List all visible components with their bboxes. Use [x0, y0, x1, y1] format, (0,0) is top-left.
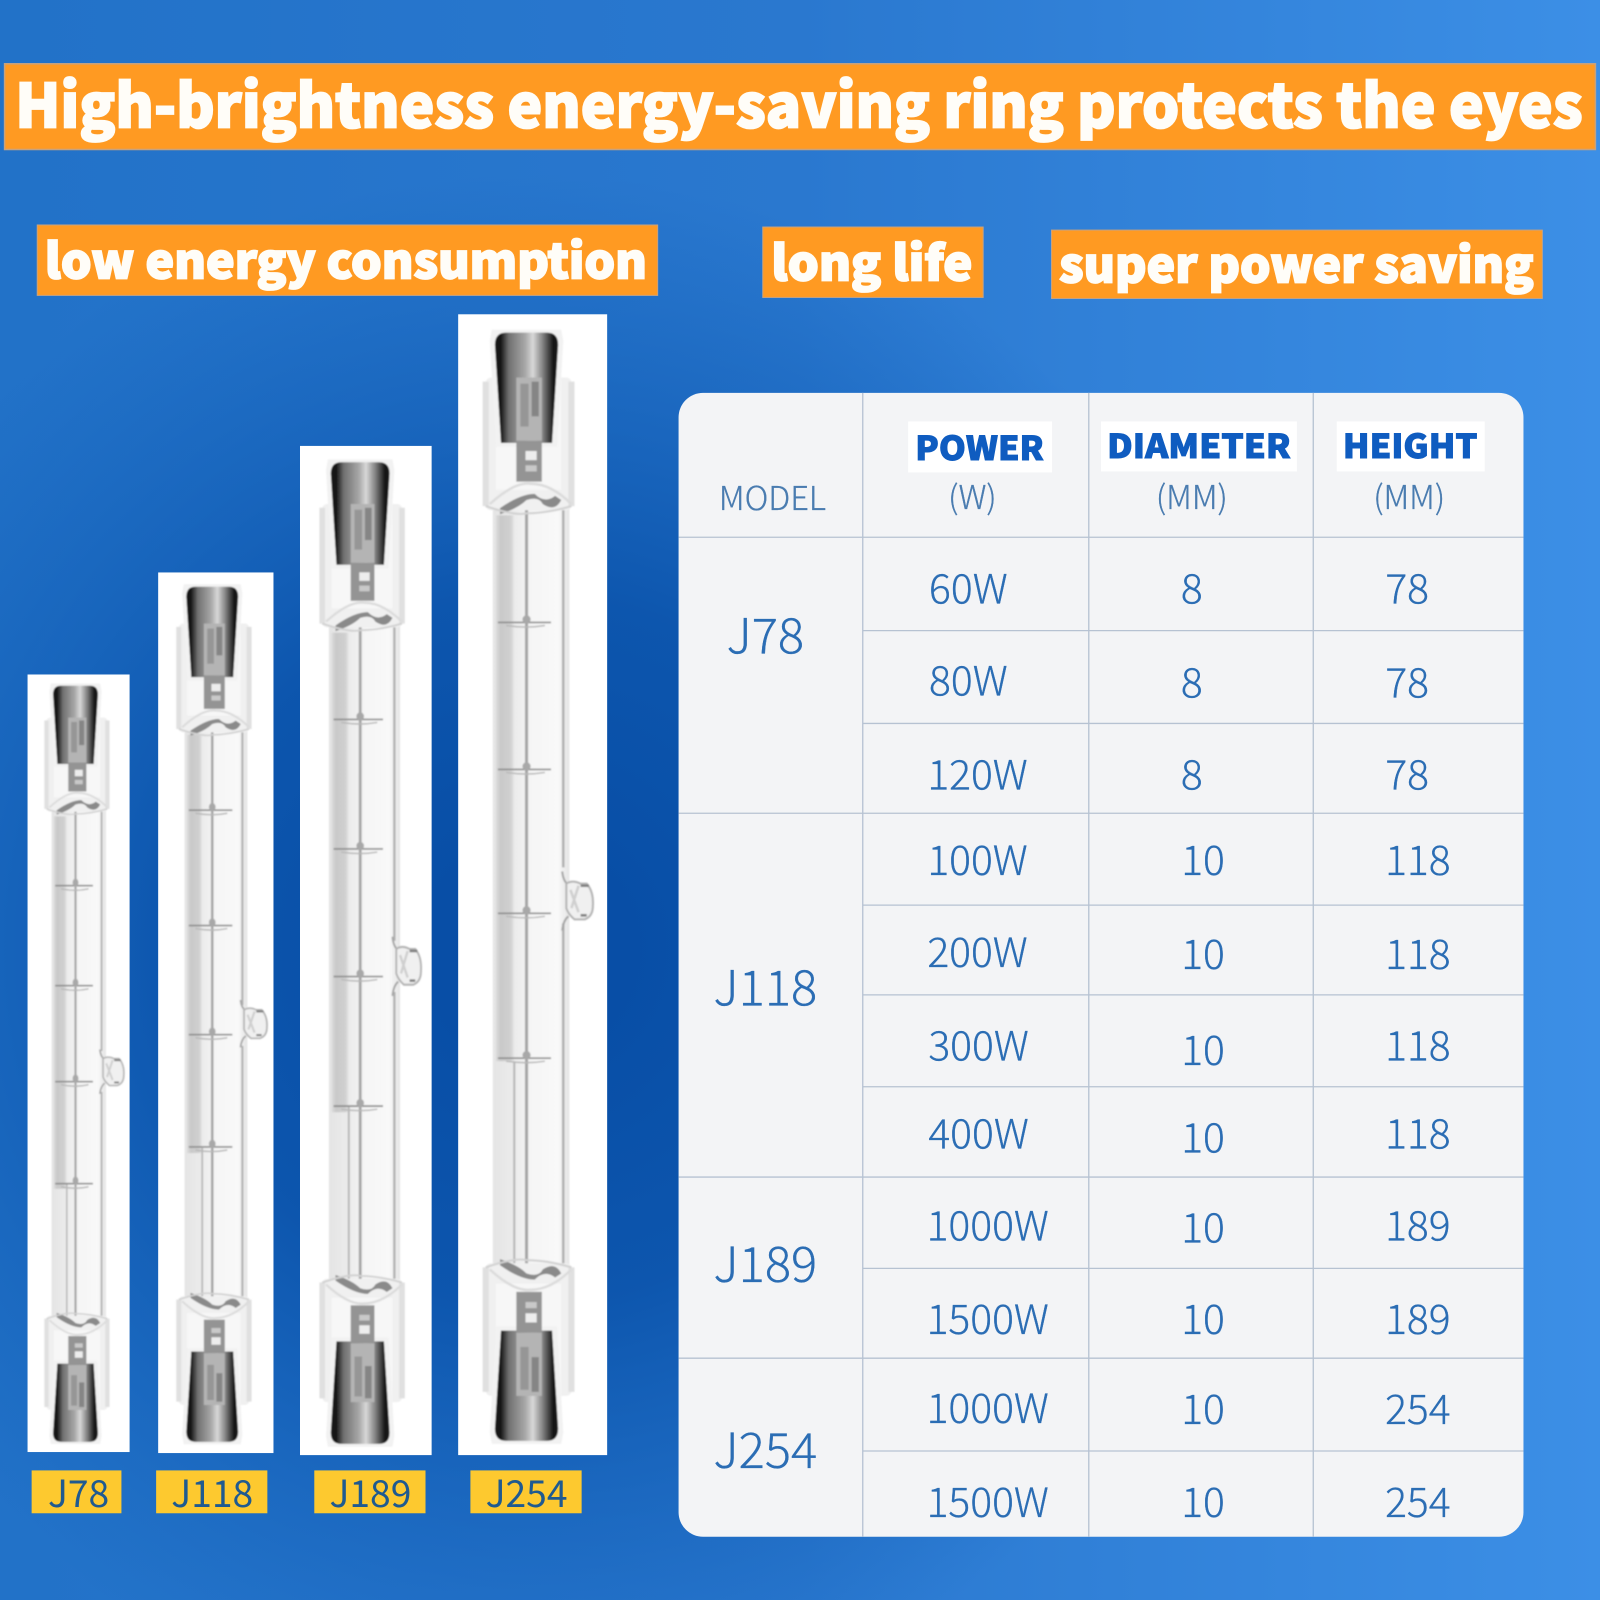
height column: 118 [1385, 922, 1451, 981]
power column: 100W [927, 828, 1028, 887]
table header: (MM) [1373, 472, 1445, 519]
power column: 1000W [927, 1193, 1049, 1252]
table header: DIAMETER [1107, 421, 1291, 468]
model names: J254 [713, 1412, 817, 1483]
badge: low energy consumption: low energy consumption [45, 223, 647, 293]
bulb J78 [28, 674, 130, 1452]
power column [927, 557, 1049, 1529]
bulb J118 [158, 572, 273, 1453]
badge: long life: long life [771, 225, 972, 295]
diameter column [1181, 557, 1225, 1529]
table header [719, 421, 1485, 520]
model names [713, 598, 817, 1483]
model names: J78 [726, 598, 804, 669]
diameter column: 10 [1181, 1018, 1225, 1077]
height column: 118 [1385, 828, 1451, 887]
label J78: J78 [48, 1464, 109, 1518]
bulb J189 [300, 446, 432, 1455]
height column: 254 [1385, 1377, 1451, 1436]
table header: (MM) [1156, 472, 1228, 519]
power column: 1000W [927, 1376, 1049, 1435]
height column: 254 [1385, 1470, 1451, 1529]
height column: 118 [1385, 1014, 1451, 1073]
label J78 [32, 1464, 121, 1518]
height column: 78 [1385, 557, 1429, 616]
model names: J189 [713, 1226, 817, 1297]
height column: 78 [1385, 742, 1429, 801]
bulb J254 [458, 314, 607, 1455]
power column: 80W [929, 648, 1008, 707]
power column: 60W [929, 557, 1008, 616]
diameter column: 8 [1181, 557, 1203, 616]
label J118: J118 [171, 1464, 253, 1518]
label J254: J254 [486, 1464, 567, 1518]
power column: 1500W [927, 1470, 1049, 1529]
diameter column: 10 [1181, 1470, 1225, 1529]
power column: 200W [927, 920, 1028, 979]
height column: 189 [1385, 1287, 1451, 1346]
power column: 400W [928, 1101, 1029, 1160]
height column: 118 [1385, 1101, 1451, 1160]
diameter column: 8 [1181, 650, 1203, 709]
table header: HEIGHT [1343, 421, 1478, 468]
diameter column: 10 [1181, 922, 1225, 981]
specification table [679, 393, 1523, 1537]
height column: 189 [1385, 1193, 1451, 1252]
diameter column: 10 [1181, 1195, 1225, 1254]
table header: (W) [948, 472, 997, 519]
title banner: High-brightness energy-saving ring protects the eyes [15, 59, 1583, 146]
diameter column: 10 [1181, 1106, 1225, 1165]
label J189: J189 [329, 1464, 411, 1518]
model names: J118 [713, 950, 817, 1021]
power column: 1500W [927, 1287, 1049, 1346]
power column: 120W [927, 742, 1028, 801]
diameter column: 10 [1181, 1287, 1225, 1346]
height column [1385, 557, 1451, 1529]
diameter column: 8 [1181, 742, 1203, 801]
diameter column: 10 [1181, 1377, 1225, 1436]
badge: super power saving: super power saving [1059, 227, 1534, 297]
diameter column: 10 [1181, 828, 1225, 887]
power column: 300W [928, 1014, 1029, 1073]
height column: 78 [1385, 650, 1429, 709]
table header: MODEL [719, 473, 826, 520]
table header: POWER [915, 423, 1044, 470]
